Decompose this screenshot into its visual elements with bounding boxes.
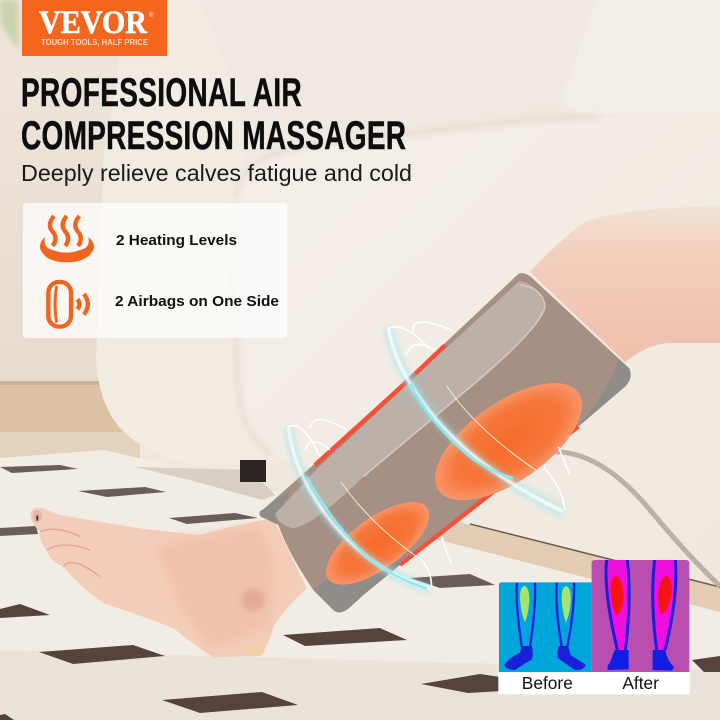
red light strips <box>315 345 578 565</box>
heating label: 2 Heating Levels <box>116 232 237 249</box>
air hose cable <box>552 452 720 586</box>
wood floor strip and patterned rug with brown dashes <box>0 450 720 720</box>
caption strip <box>498 672 690 694</box>
cuff quilted upper band <box>275 281 545 528</box>
airbags label: 2 Airbags on One Side <box>115 293 279 310</box>
sofa arm <box>96 0 275 466</box>
after thermal image <box>592 560 689 672</box>
air ring lower <box>288 420 452 588</box>
before and after comparison: After <box>622 673 659 693</box>
before and after comparison <box>498 560 690 694</box>
compression massager cuff <box>259 273 631 612</box>
subtitle: Deeply relieve calves fatigue and cold <box>21 160 412 186</box>
foot and ankle <box>31 507 307 657</box>
cuff grey end caps <box>259 359 631 612</box>
upper calf skin <box>530 206 720 362</box>
VEVOR logo: VEVOR <box>39 5 148 41</box>
feature panel <box>23 203 287 338</box>
labels: Before <box>522 673 573 693</box>
VEVOR logo <box>22 0 167 56</box>
VEVOR logo: TOUGH TOOLS, HALF PRICE <box>41 37 148 47</box>
heated zones <box>416 360 601 523</box>
title <box>21 71 406 158</box>
airflow arrows <box>341 386 537 557</box>
icon: heating <box>40 216 94 262</box>
VEVOR logo: ® <box>149 12 154 19</box>
cuff body <box>259 273 631 612</box>
title: COMPRESSION MASSAGER <box>21 114 406 158</box>
before thermal image <box>499 582 592 672</box>
seat cushion <box>234 110 720 590</box>
title: PROFESSIONAL AIR <box>21 71 302 115</box>
right cushion <box>563 0 720 116</box>
air ring upper <box>388 322 570 512</box>
icon: airbag <box>48 282 88 327</box>
back cushion <box>130 0 596 200</box>
